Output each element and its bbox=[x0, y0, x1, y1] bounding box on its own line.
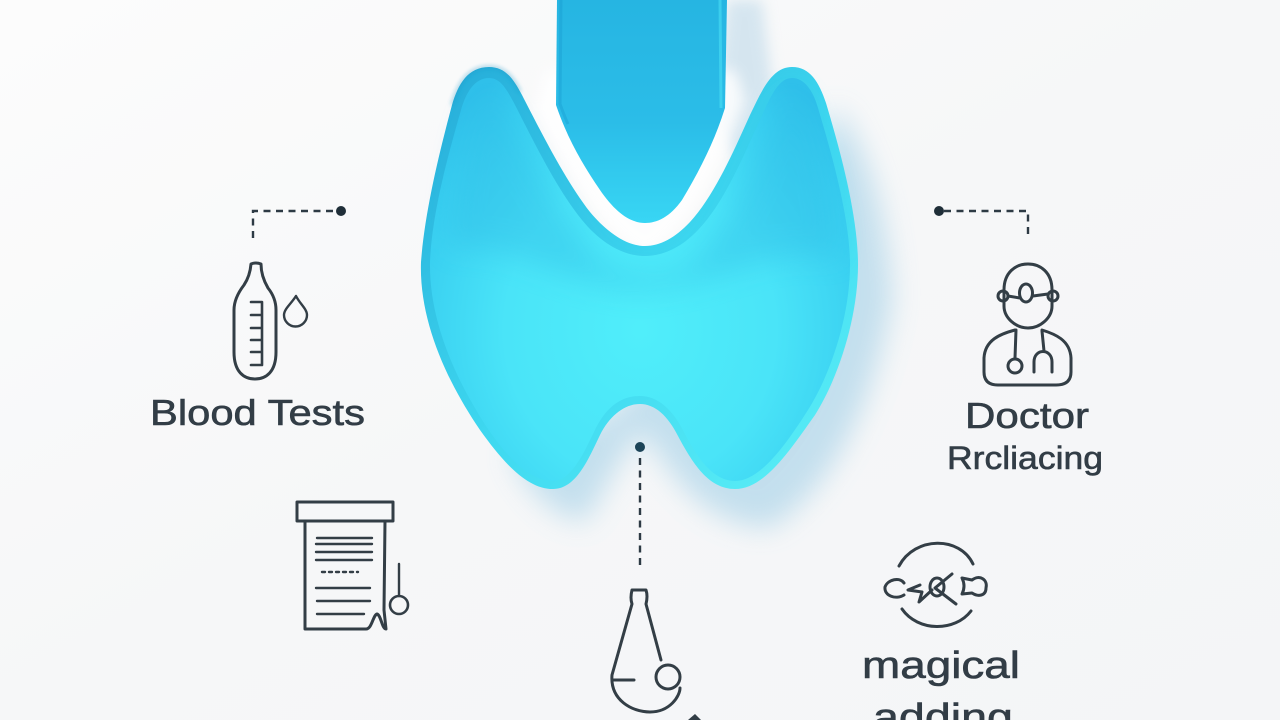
gland rim dark top bbox=[452, 67, 520, 105]
gland inner surface bbox=[430, 78, 850, 481]
neck shadow bbox=[715, 0, 772, 165]
icon: small triangle at bottom bbox=[688, 714, 701, 720]
icon: report scroll bbox=[297, 502, 408, 629]
label: rrcliacing: Rrcliacing bbox=[947, 440, 1103, 476]
connector: blood tests bbox=[253, 206, 346, 238]
label: blood tests: Blood Tests bbox=[150, 392, 365, 433]
icon: circular symbol bbox=[885, 543, 986, 627]
notch highlight bbox=[535, 70, 745, 256]
trachea bbox=[556, 0, 727, 223]
gland outline bbox=[421, 67, 858, 489]
thyroid drop shadow bbox=[510, 105, 892, 528]
trachea right edge bbox=[720, 0, 721, 108]
icon: blood test tube bbox=[234, 263, 307, 379]
connector: doctor bbox=[934, 206, 1028, 238]
icon: doctor bbox=[984, 264, 1071, 385]
trachea left edge bbox=[560, 0, 568, 124]
connector: flask bbox=[635, 442, 645, 568]
label: magical: magical bbox=[862, 645, 1020, 687]
icon: flask bbox=[612, 590, 680, 712]
gland upper shading bbox=[450, 88, 838, 290]
label: doctor: Doctor bbox=[965, 395, 1089, 436]
thyroid illustration bbox=[421, 0, 892, 528]
